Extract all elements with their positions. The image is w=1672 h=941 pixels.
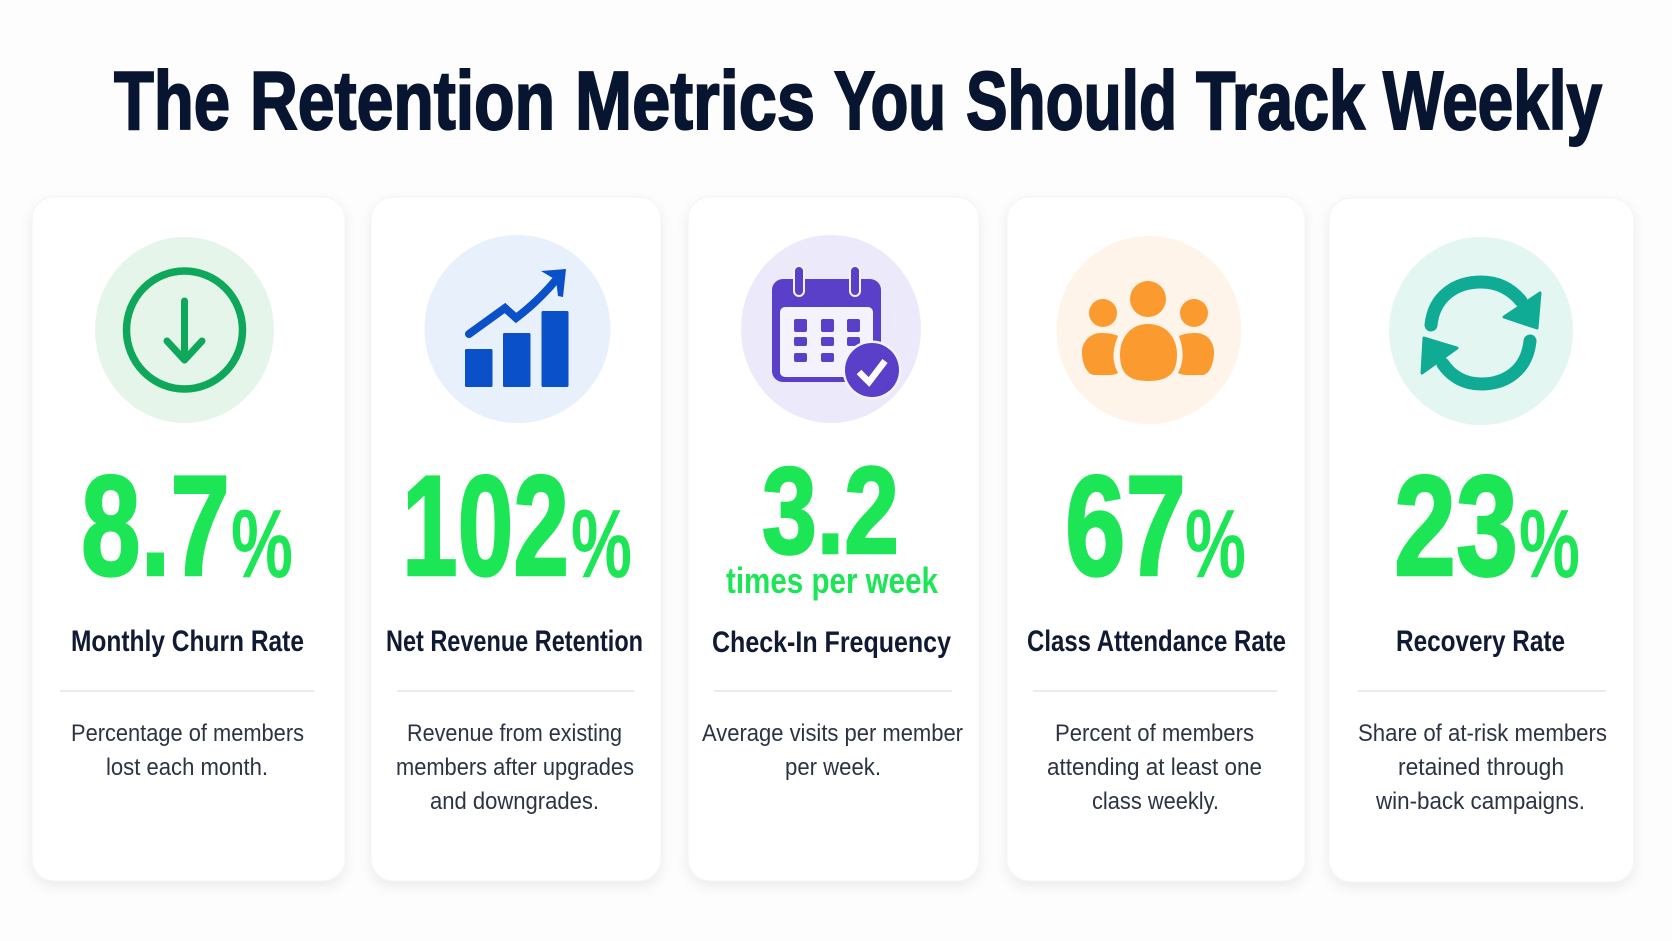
panel: check-in frequency — [688, 197, 979, 881]
icon: circular refresh arrows — [1389, 237, 1573, 425]
title — [114, 54, 1602, 147]
title: Should — [966, 54, 1177, 147]
description: and downgrades. — [430, 788, 599, 815]
description — [1358, 720, 1607, 815]
description — [1047, 720, 1262, 815]
metric value: % — [1519, 489, 1580, 598]
title: Metrics — [575, 54, 815, 147]
description: Revenue from existing — [407, 720, 622, 747]
metric label: Check-In Frequency — [712, 626, 951, 659]
panel: monthly churn rate — [32, 197, 345, 881]
metric value: % — [1185, 489, 1246, 598]
metric label: Recovery Rate — [1396, 625, 1565, 658]
panel: recovery rate — [1329, 198, 1634, 882]
icon: rising bar chart — [424, 235, 610, 423]
title: Weekly — [1383, 54, 1602, 147]
description: class weekly. — [1092, 788, 1219, 815]
description: members after upgrades — [396, 754, 634, 781]
panel: class attendance rate — [1007, 197, 1305, 881]
description — [71, 720, 304, 781]
metric value: 8.7 — [81, 447, 230, 606]
panel: net revenue retention — [371, 197, 661, 881]
metric value: 102 — [402, 447, 569, 606]
description: Percent of members — [1055, 720, 1254, 747]
metric value: 23 — [1394, 447, 1518, 606]
title: You — [834, 54, 946, 147]
icon: group of people — [1056, 236, 1242, 424]
description — [702, 720, 963, 781]
icon: download arrow in circle — [95, 237, 274, 423]
metric label: Monthly Churn Rate — [71, 625, 304, 658]
title: The — [114, 54, 230, 147]
metric value: 3.2 — [762, 443, 899, 580]
metric label: Net Revenue Retention — [386, 625, 643, 658]
icon: calendar with check badge — [741, 235, 921, 423]
description — [396, 720, 634, 815]
metric value: % — [231, 489, 293, 598]
description: attending at least one — [1047, 754, 1262, 781]
description: win-back campaigns. — [1375, 788, 1585, 815]
description: Average visits per member — [702, 720, 963, 747]
description: Percentage of members — [71, 720, 304, 747]
description: retained through — [1398, 754, 1564, 781]
metric value: 67 — [1065, 447, 1186, 606]
description: lost each month. — [106, 754, 268, 781]
title: Track — [1196, 54, 1366, 147]
metric value: % — [571, 489, 632, 598]
metric unit: times per week — [726, 560, 939, 601]
description: Share of at-risk members — [1358, 720, 1607, 747]
title: Retention — [250, 54, 555, 147]
description: per week. — [785, 754, 881, 781]
metric label: Class Attendance Rate — [1027, 625, 1286, 658]
